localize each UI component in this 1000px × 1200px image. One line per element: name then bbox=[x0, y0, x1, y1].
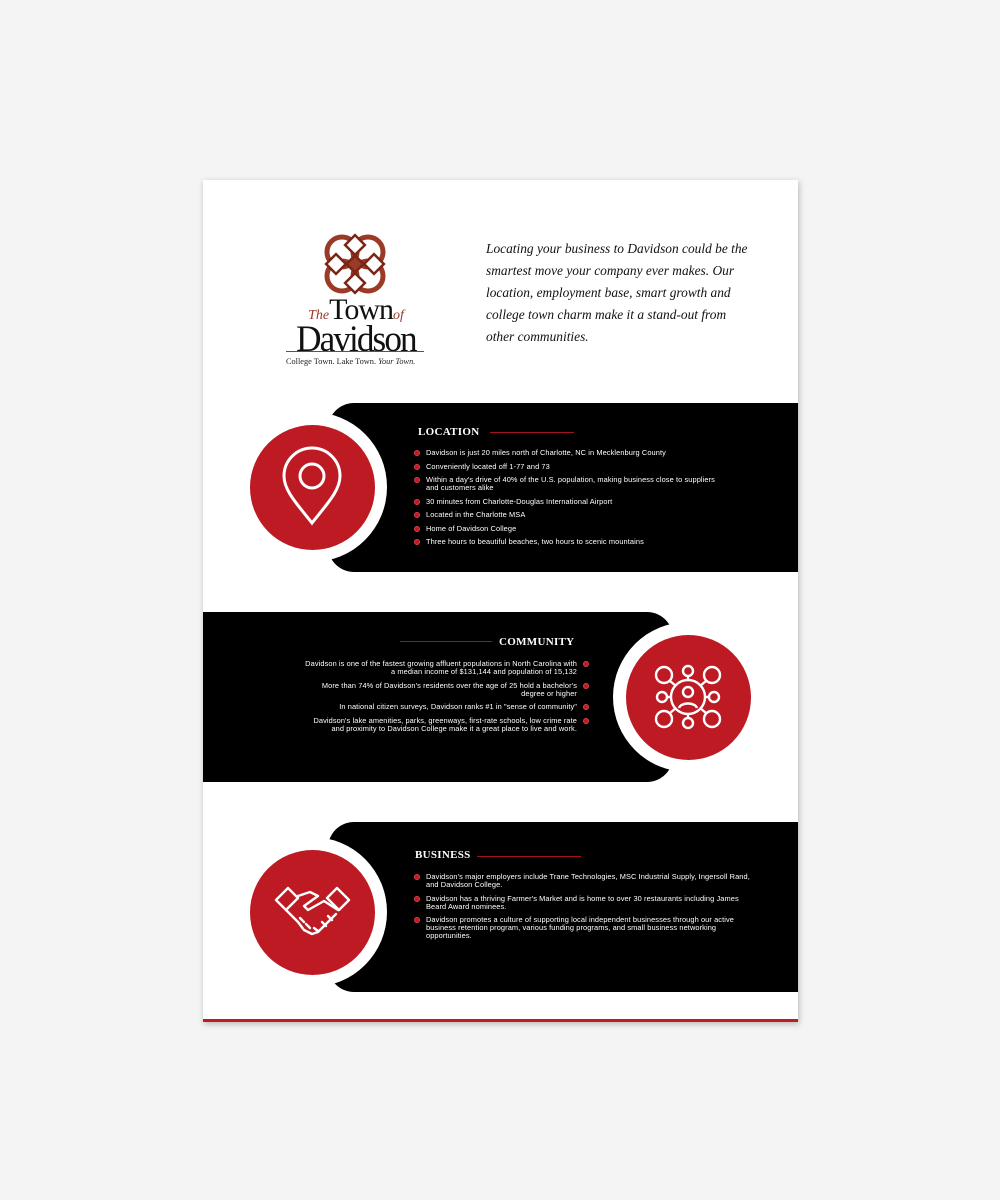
logo wordmark bbox=[296, 293, 418, 360]
logo wordmark: Davidson bbox=[296, 319, 416, 360]
heading: community bbox=[400, 641, 492, 642]
location bullets: Conveniently located off 1-77 and 73 bbox=[426, 462, 550, 470]
heading: business: BUSINESS bbox=[415, 849, 471, 861]
intro text: Locating your business to Davidson could be the smartest move your company ever makes. Our location, employment base, smart growth and college town charm make it a stand-out from other communities. bbox=[486, 241, 747, 344]
community bullets bbox=[305, 659, 589, 732]
logo wordmark: TheTownof bbox=[308, 293, 404, 326]
logo bbox=[286, 234, 424, 366]
icon: location pin bbox=[250, 425, 375, 550]
logo: College Town. Lake Town. Your Town. bbox=[286, 357, 415, 366]
location bullets: Home of Davidson College bbox=[426, 524, 516, 532]
location bullets: Three hours to beautiful beaches, two hours to scenic mountains bbox=[426, 537, 644, 546]
community bullets: In national citizen surveys, Davidson ranks #1 in "sense of community" bbox=[339, 702, 577, 711]
business bullets: Davidson promotes a culture of supporting local independent businesses through our active business retention program, various funding programs, and small business networking opportunities. bbox=[426, 915, 734, 940]
panel: community: COMMUNITY bbox=[499, 636, 574, 648]
icon: community network bbox=[626, 635, 751, 760]
location bullets: 30 minutes from Charlotte-Douglas International Airport bbox=[426, 496, 612, 506]
community bullets: Davidson is one of the fastest growing affluent populations in North Carolina with a median income of $131,144 and population of 15,132 bbox=[305, 659, 577, 676]
page bbox=[203, 180, 798, 1022]
icon: handshake bbox=[250, 850, 375, 975]
location bullets bbox=[414, 448, 715, 546]
footer red line bbox=[203, 1019, 798, 1022]
location bullets: Within a day's drive of 40% of the U.S. population, making business close to suppliers and customers alike bbox=[426, 475, 715, 492]
panel: community bbox=[203, 612, 751, 782]
panel: location bbox=[250, 403, 798, 572]
location bullets: Located in the Charlotte MSA bbox=[426, 510, 525, 519]
business bullets bbox=[414, 872, 750, 940]
business bullets: Davidson has a thriving Farmer's Market and is home to over 30 restaurants including James Beard Award nominees. bbox=[426, 894, 739, 910]
location bullets: Davidson is just 20 miles north of Charlotte, NC in Mecklenburg County bbox=[426, 448, 666, 457]
community bullets: More than 74% of Davidson's residents over the age of 25 hold a bachelor's degree or higher bbox=[322, 680, 577, 698]
logo emblem bbox=[324, 234, 386, 295]
community bullets: Davidson's lake amenities, parks, greenways, first-rate schools, low crime rate and proximity to Davidson College make it a great place to live and work. bbox=[313, 716, 577, 732]
heading: location: LOCATION bbox=[418, 426, 479, 438]
business bullets: Davidson's major employers include Trane Technologies, MSC Industrial Supply, Ingersoll Rand, and Davidson College. bbox=[426, 872, 750, 889]
panel: business bbox=[250, 822, 798, 992]
